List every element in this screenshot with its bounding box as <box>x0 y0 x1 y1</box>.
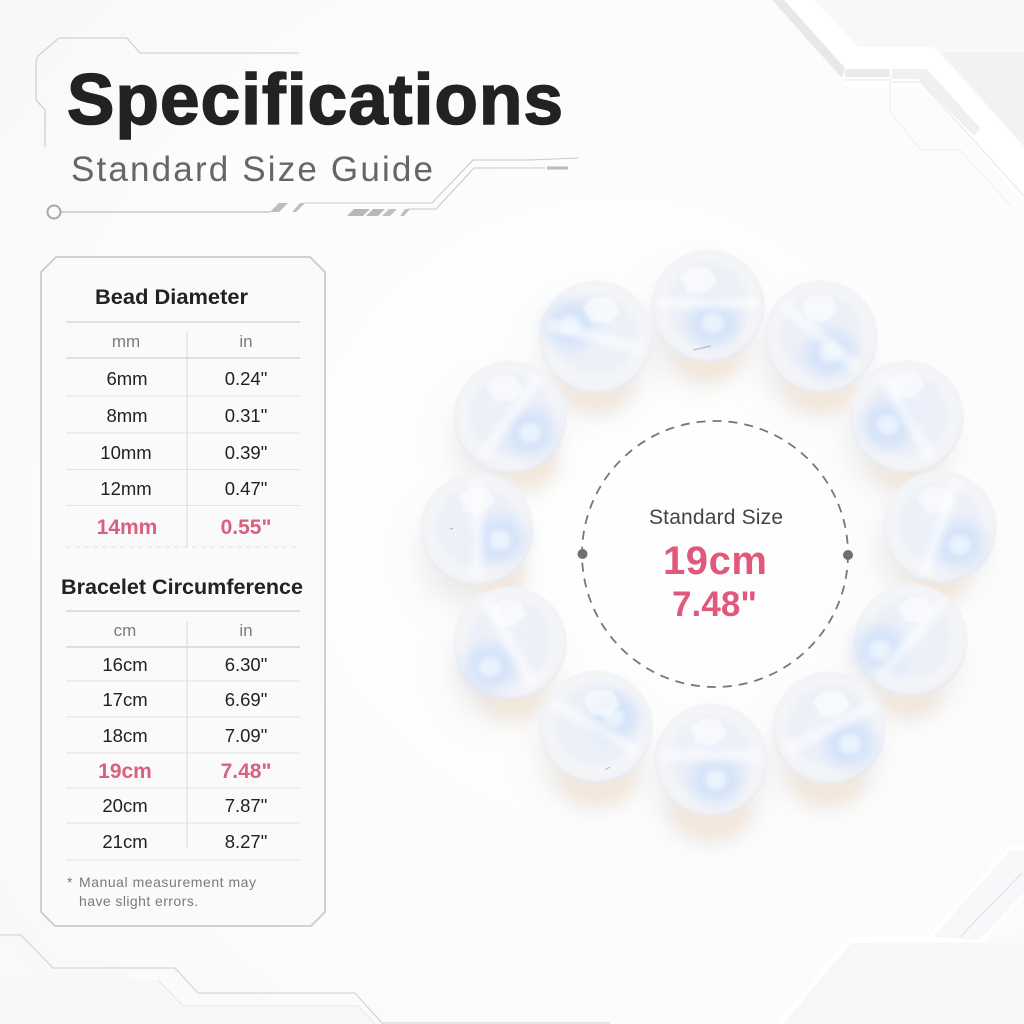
bottom-left circuit decoration <box>0 935 610 1024</box>
table: bead diameter: 0.24" <box>225 368 267 389</box>
standard size callout: 19cm <box>663 539 767 583</box>
table: bracelet circumference: 8.27" <box>225 831 267 852</box>
table: bead diameter: 0.47" <box>225 478 267 499</box>
table: bead diameter: in <box>239 332 253 351</box>
footnote: * <box>67 874 73 890</box>
table: bracelet circumference: 21cm <box>102 831 148 852</box>
table: bracelet circumference: 7.48" <box>221 760 271 783</box>
table: bead diameter: mm <box>112 332 140 351</box>
table: bracelet circumference: 6.30" <box>225 654 267 675</box>
table: bracelet circumference: 7.87" <box>225 795 267 816</box>
bottom-right glass decoration <box>780 848 1024 1024</box>
table: bracelet circumference: 16cm <box>102 654 148 675</box>
standard size callout: 7.48" <box>672 585 757 624</box>
standard size callout <box>649 506 783 624</box>
table: bracelet circumference: 19cm <box>98 760 152 783</box>
table: bead diameter: 6mm <box>106 368 148 389</box>
panel: size tables <box>41 257 325 926</box>
table: bead diameter: 8mm <box>106 405 148 426</box>
table: bead diameter <box>66 286 300 547</box>
table: bead diameter: 14mm <box>97 516 157 539</box>
table: bead diameter: 12mm <box>100 478 152 499</box>
panel background <box>41 257 325 926</box>
table: bead diameter: 0.39" <box>225 442 267 463</box>
bracelet of moonstone beads <box>420 250 996 816</box>
footnote: Manual measurement may <box>79 874 256 890</box>
title decoration lines <box>36 38 578 218</box>
table: bracelet circumference: 17cm <box>102 689 148 710</box>
top-right glass decoration <box>772 0 1024 205</box>
table: bracelet circumference: in <box>239 621 253 640</box>
bead shadows <box>422 280 980 840</box>
heading: bead diameter: Bead Diameter <box>95 286 248 309</box>
footnote <box>67 874 256 909</box>
footnote: have slight errors. <box>79 893 198 909</box>
heading: bracelet circumference: Bracelet Circumference <box>61 576 303 599</box>
standard size callout: Standard Size <box>649 506 783 529</box>
table: bead diameter: 0.55" <box>221 516 271 539</box>
table: bracelet circumference: 7.09" <box>225 725 267 746</box>
subtitle: Standard Size Guide <box>71 150 433 189</box>
table: bead diameter: 0.31" <box>225 405 267 426</box>
title: Specifications <box>67 61 563 140</box>
table: bracelet circumference: 20cm <box>102 795 148 816</box>
table: bracelet circumference <box>61 576 303 860</box>
table: bracelet circumference: 6.69" <box>225 689 267 710</box>
table: bracelet circumference: cm <box>114 621 136 640</box>
table: bead diameter: 10mm <box>100 442 152 463</box>
table: bracelet circumference: 18cm <box>102 725 148 746</box>
size ring dashed circle <box>578 421 853 687</box>
